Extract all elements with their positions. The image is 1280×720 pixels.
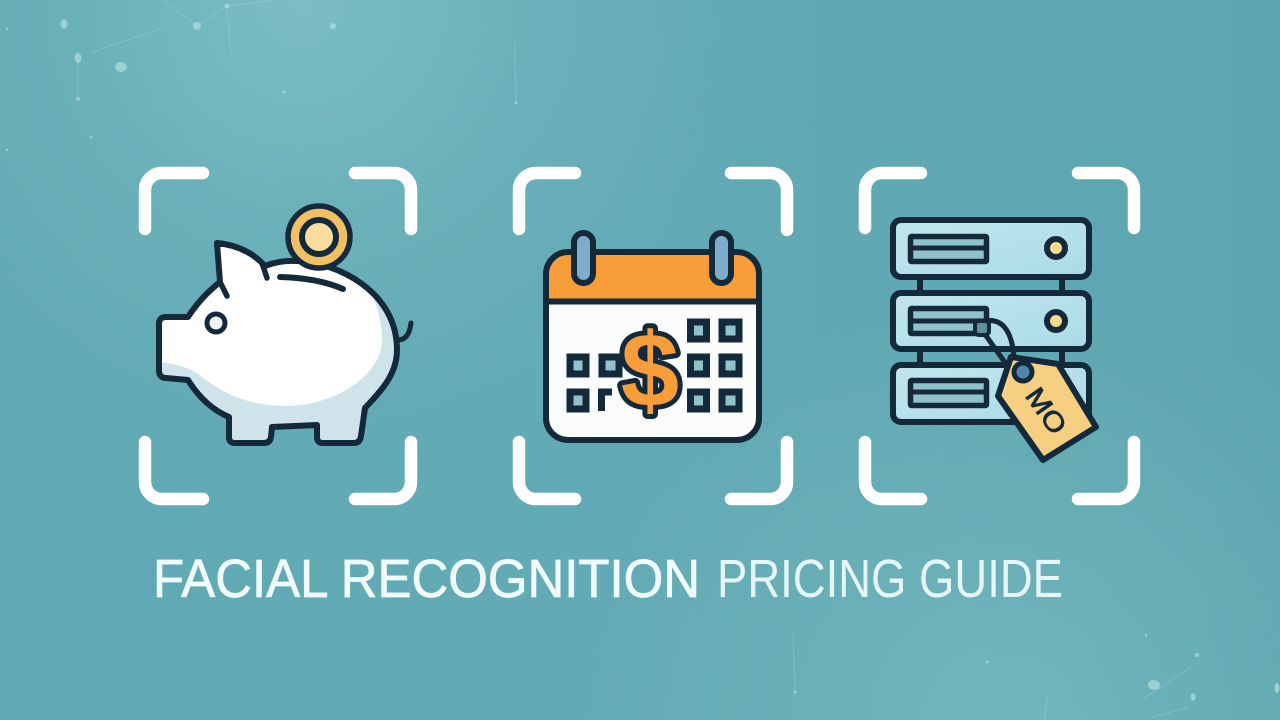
title: FACIAL RECOGNITION — [153, 549, 700, 609]
icon: server rack with price tag — [893, 220, 1096, 460]
title — [153, 549, 1063, 609]
corner brackets: server — [865, 173, 1134, 499]
dollar sign: $ — [621, 312, 679, 429]
price tag — [975, 320, 1096, 460]
date cells — [570, 322, 739, 411]
corner brackets: calendar — [519, 173, 787, 499]
binder rings — [574, 233, 731, 283]
panel: calendar — [519, 173, 787, 499]
icon: calendar with dollar — [546, 233, 759, 440]
title: PRICING GUIDE — [717, 549, 1063, 609]
panel: server — [865, 173, 1134, 499]
price tag: MO — [1019, 382, 1073, 440]
coin — [288, 206, 350, 268]
eye — [207, 314, 225, 332]
icon: piggy bank — [150, 206, 411, 450]
corner brackets: savings — [145, 173, 411, 499]
panel: savings — [145, 173, 411, 499]
